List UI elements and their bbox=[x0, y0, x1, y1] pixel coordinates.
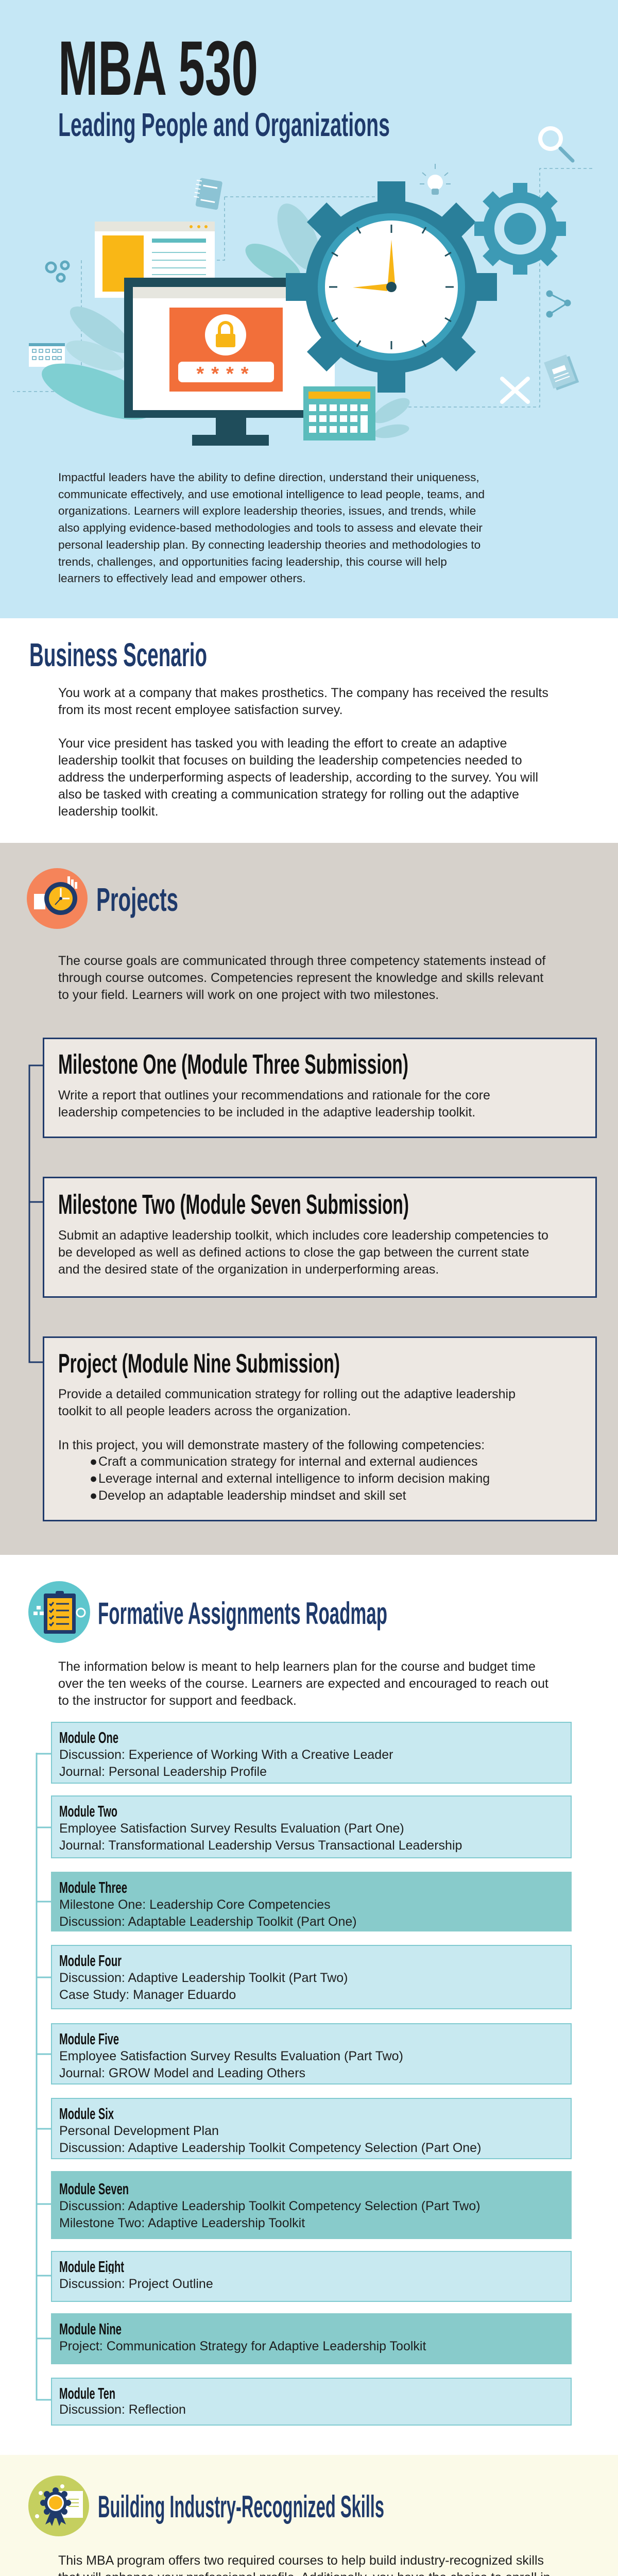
milestone one text: leadership competencies to be included in the adaptive leadership toolkit. bbox=[58, 1105, 475, 1120]
monitor: **** bbox=[196, 363, 256, 385]
module five bbox=[51, 2023, 572, 2084]
project text: Provide a detailed communication strategy for rolling out the adaptive leadership bbox=[58, 1387, 516, 1401]
text: business scenario paragraph 2: leadership toolkit that focuses on building the leadership competencies needed to bbox=[58, 753, 522, 768]
module one: Journal: Personal Leadership Profile bbox=[59, 1765, 267, 1779]
module four: Case Study: Manager Eduardo bbox=[59, 1988, 236, 2002]
module eight: Discussion: Project Outline bbox=[59, 2277, 213, 2291]
hero section background bbox=[0, 0, 618, 618]
milestone two text: Submit an adaptive leadership toolkit, which includes core leadership competencies to bbox=[58, 1228, 548, 1243]
icon: formative clipboard bbox=[28, 1581, 90, 1643]
module one bbox=[51, 1722, 572, 1784]
hero intro text: organizations. Learners will explore leadership theories, issues, and trends, while bbox=[58, 504, 476, 517]
project competencies list: Develop an adaptable leadership mindset and skill set bbox=[98, 1488, 406, 1503]
module six bbox=[51, 2098, 572, 2159]
hero intro text: personal leadership plan. By connecting leadership theories and methodologies to bbox=[58, 538, 480, 551]
project competencies list: Craft a communication strategy for internal and external audiences bbox=[98, 1454, 478, 1469]
text: business scenario paragraph 2: Your vice president has tasked you with leading the effort to create an adaptive bbox=[58, 736, 507, 751]
text: projects intro: through course outcomes. Competencies represent the knowledge and skills relevant bbox=[58, 971, 543, 985]
module ten: Discussion: Reflection bbox=[59, 2402, 186, 2417]
text: business scenario paragraph 2 bbox=[58, 736, 538, 819]
icon: share bbox=[547, 291, 570, 317]
text: skills intro: This MBA program offers two required courses to help build industry-recognized skills bbox=[58, 2553, 544, 2568]
small gear bbox=[474, 183, 566, 275]
text: roadmap intro: to the instructor for support and feedback. bbox=[58, 1693, 297, 1708]
module six: Discussion: Adaptive Leadership Toolkit Competency Selection (Part One) bbox=[59, 2141, 481, 2155]
milestone one text: Write a report that outlines your recommendations and rationale for the core bbox=[58, 1088, 490, 1103]
module seven bbox=[51, 2171, 572, 2239]
hero intro text: learners to effectively lead and empower others. bbox=[58, 572, 306, 585]
module four: Discussion: Adaptive Leadership Toolkit (Part Two) bbox=[59, 1971, 348, 1985]
module seven: Discussion: Adaptive Leadership Toolkit Competency Selection (Part Two) bbox=[59, 2199, 480, 2213]
project text: In this project, you will demonstrate mastery of the following competencies: bbox=[58, 1438, 485, 1452]
module two bbox=[51, 1795, 572, 1858]
project competencies list: ● bbox=[90, 1471, 97, 1486]
text: roadmap intro: The information below is meant to help learners plan for the course and budget time bbox=[58, 1659, 536, 1674]
hero illustration bbox=[13, 126, 592, 446]
hero intro text: trends, challenges, and opportunities facing leadership, this course will help bbox=[58, 555, 447, 568]
milestone two text: and the desired state of the organization in underperforming areas. bbox=[58, 1262, 439, 1277]
icon: wrench bbox=[502, 379, 528, 402]
project competencies list: ● bbox=[90, 1454, 97, 1469]
module one: Discussion: Experience of Working With a Creative Leader bbox=[59, 1748, 393, 1762]
icon: projects clock bbox=[27, 868, 88, 929]
skills section background bbox=[0, 2455, 618, 2576]
module nine: Project: Communication Strategy for Adaptive Leadership Toolkit bbox=[59, 2339, 426, 2353]
text: business scenario paragraph 1: You work at a company that makes prosthetics. The company has received the results bbox=[58, 686, 548, 700]
panel: project final bbox=[43, 1336, 597, 1521]
hero intro text: Impactful leaders have the ability to define direction, understand their uniqueness, bbox=[58, 471, 479, 484]
module five: Journal: GROW Model and Leading Others bbox=[59, 2066, 305, 2080]
big gear clock bbox=[286, 181, 497, 393]
panel: milestone two bbox=[43, 1177, 597, 1298]
panel: milestone one bbox=[43, 1038, 597, 1138]
leaves bbox=[35, 197, 414, 440]
icon: light bulb bbox=[420, 164, 451, 195]
roadmap connector line bbox=[36, 1753, 51, 2401]
milestone one text bbox=[58, 1088, 490, 1120]
text: skills intro bbox=[58, 2553, 551, 2576]
milestone two text: be developed as well as defined actions to close the gap between the current state bbox=[58, 1245, 529, 1260]
module three: Discussion: Adaptable Leadership Toolkit (Part One) bbox=[59, 1914, 357, 1929]
icon: small calendar bbox=[29, 343, 65, 367]
browser window bbox=[95, 222, 215, 298]
hero intro text: communicate effectively, and use emotional intelligence to lead people, teams, and bbox=[58, 488, 485, 501]
text: business scenario paragraph 1: from its most recent employee satisfaction survey. bbox=[58, 703, 343, 717]
monitor bbox=[124, 278, 335, 446]
projects section background bbox=[0, 843, 618, 1555]
text: projects intro: The course goals are communicated through three competency statements instead of bbox=[58, 954, 545, 968]
project text: toolkit to all people leaders across the organization. bbox=[58, 1404, 351, 1418]
icon: magnifier bbox=[538, 126, 573, 161]
project competencies list bbox=[90, 1454, 490, 1503]
text: projects intro: to your field. Learners will work on one project with two milestones. bbox=[58, 988, 439, 1002]
module four bbox=[51, 1945, 572, 2009]
project competencies list: Leverage internal and external intelligence to inform decision making bbox=[98, 1471, 490, 1486]
module two: Journal: Transformational Leadership Versus Transactional Leadership bbox=[59, 1838, 462, 1853]
module ten bbox=[51, 2378, 572, 2426]
icon: document bbox=[544, 353, 579, 391]
text: business scenario paragraph 2: leadership toolkit. bbox=[58, 804, 159, 819]
calculator bbox=[303, 386, 375, 440]
icon: small gears left bbox=[46, 262, 68, 281]
module six: Personal Development Plan bbox=[59, 2124, 219, 2138]
module nine bbox=[51, 2313, 572, 2364]
project text bbox=[58, 1387, 516, 1452]
milestone two text bbox=[58, 1228, 548, 1277]
text: roadmap intro: over the ten weeks of the course. Learners are expected and encouraged to reach out bbox=[58, 1676, 548, 1691]
text: business scenario paragraph 2: address the underperforming aspects of leadership, according to the survey. You will bbox=[58, 770, 538, 785]
module eight bbox=[51, 2251, 572, 2302]
text: roadmap intro bbox=[58, 1659, 548, 1708]
module two: Employee Satisfaction Survey Results Evaluation (Part One) bbox=[59, 1821, 404, 1836]
hero intro text bbox=[58, 471, 485, 585]
text: projects intro bbox=[58, 954, 546, 1002]
project competencies list: ● bbox=[90, 1488, 97, 1503]
module seven: Milestone Two: Adaptive Leadership Toolkit bbox=[59, 2216, 305, 2230]
text: business scenario paragraph 1 bbox=[58, 686, 548, 717]
milestone connector line bbox=[29, 1064, 43, 1363]
text: business scenario paragraph 2: also be tasked with creating a communication strategy for rolling out the adaptive bbox=[58, 787, 519, 802]
hero intro text: also applying evidence-based methodologies and tools to assess and elevate their bbox=[58, 521, 483, 534]
dashed connector lines bbox=[13, 168, 592, 407]
module five: Employee Satisfaction Survey Results Evaluation (Part Two) bbox=[59, 2049, 403, 2063]
icon: skills badge bbox=[28, 2476, 89, 2536]
module three bbox=[51, 1872, 572, 1931]
module three: Milestone One: Leadership Core Competencies bbox=[59, 1897, 331, 1912]
icon: notepad bbox=[192, 177, 222, 210]
